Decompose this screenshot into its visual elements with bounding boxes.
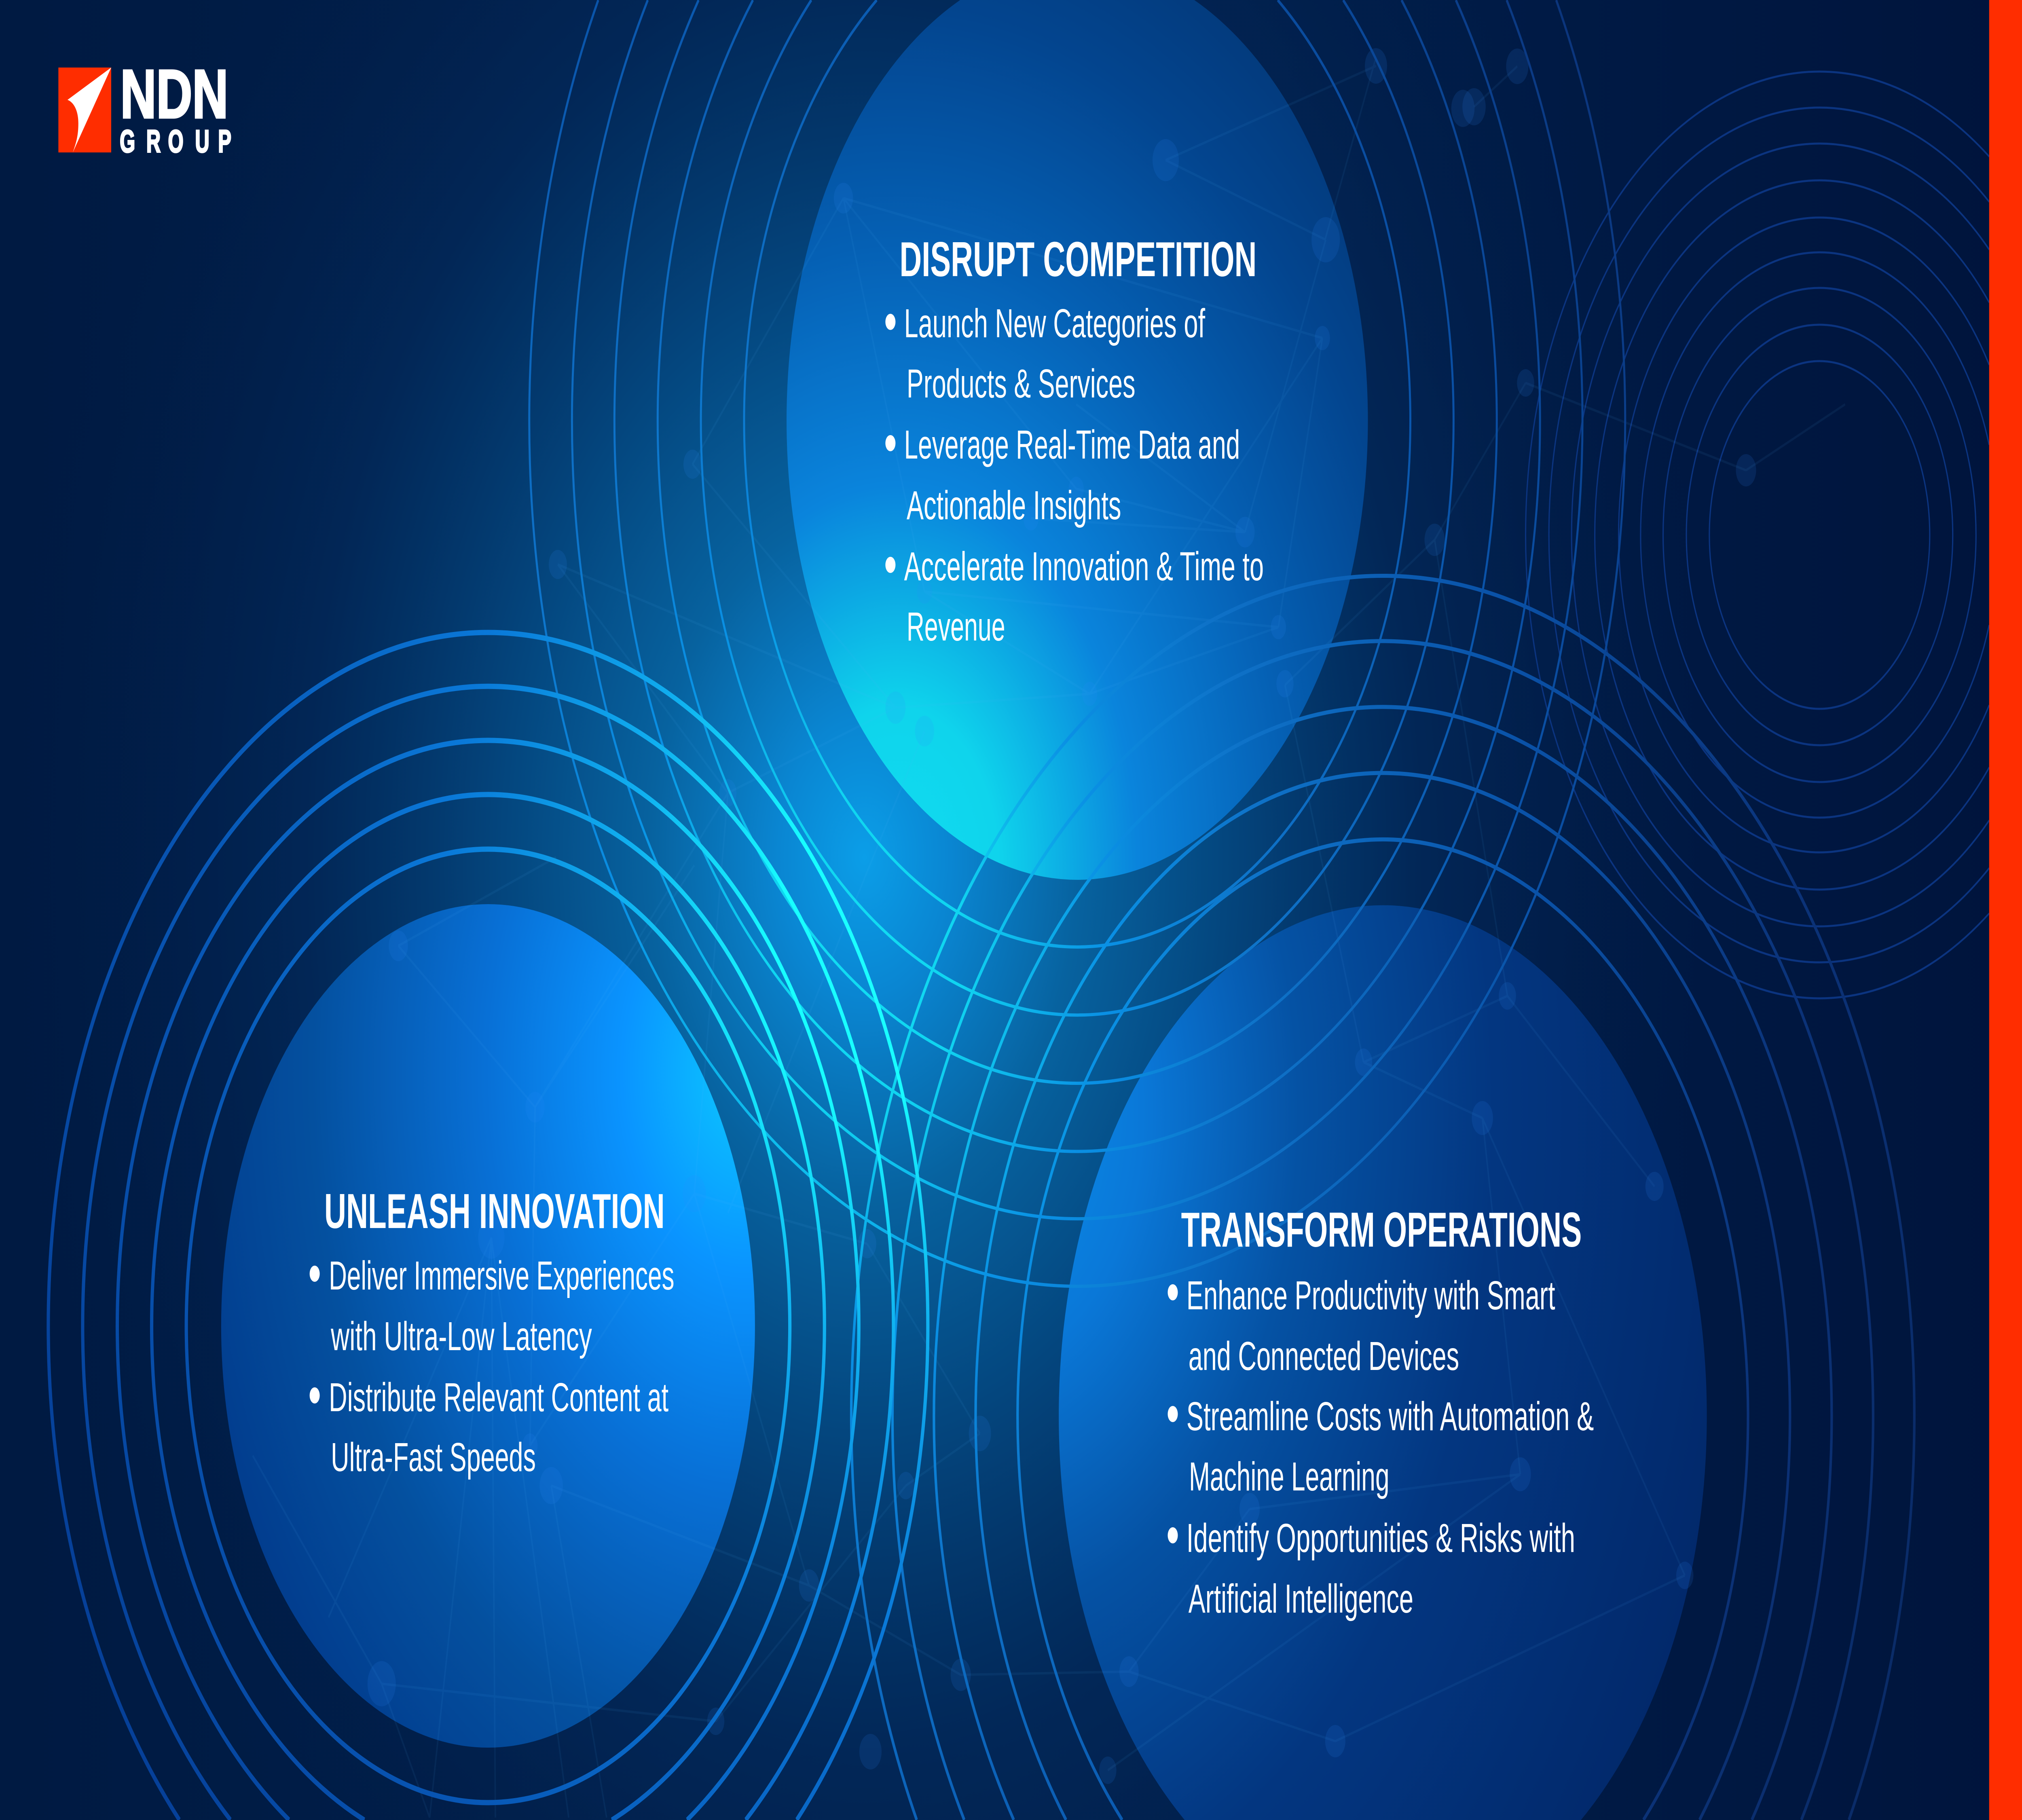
bullet list: unleash innovation: Distribute Relevant Content at: [329, 1375, 668, 1420]
panel: unleash innovation text: [310, 1184, 675, 1480]
logo wordmark: GROUP: GROUP: [120, 123, 231, 159]
right accent bar: [1989, 0, 2022, 1820]
logo wordmark: NDN: NDN: [121, 56, 228, 133]
bullet list: transform operations: Streamline Costs with Automation &: [1187, 1394, 1594, 1439]
bullet list: transform operations: Artificial Intelligence: [1189, 1576, 1413, 1621]
circle: transform operations: [1059, 905, 1707, 1820]
bullet list: disrupt competition: [885, 301, 1264, 649]
bullet list: disrupt competition: Launch New Categories of: [904, 301, 1206, 346]
panel: disrupt competition text: [885, 232, 1264, 649]
bullet list: disrupt competition: Accelerate Innovation & Time to: [904, 544, 1264, 589]
bullet list: unleash innovation: [310, 1253, 675, 1480]
rings around disrupt competition: [529, 0, 1625, 1286]
logo icon: red square with white dart: [58, 68, 111, 152]
bullet list: disrupt competition: Actionable Insights: [907, 483, 1121, 528]
far right concentric rings: [1525, 72, 1989, 998]
bullet list: transform operations: Enhance Productivity with Smart: [1187, 1273, 1555, 1318]
logo: NDN Group: [58, 56, 231, 159]
bullet list: unleash innovation: with Ultra-Low Latency: [330, 1314, 592, 1359]
bullet list: unleash innovation: Deliver Immersive Experiences: [329, 1253, 675, 1298]
bullet list: transform operations: Identify Opportunities & Risks with: [1187, 1516, 1575, 1561]
circle: unleash innovation: [221, 904, 755, 1748]
bullet list: disrupt competition: Products & Services: [907, 361, 1136, 406]
rings around transform operations: [851, 576, 1914, 1820]
network mesh overlay: [253, 48, 1845, 1818]
circle: disrupt competition: [787, 0, 1368, 880]
rings around unleash innovation: [48, 632, 928, 1820]
bullet list: disrupt competition: Revenue: [907, 604, 1005, 649]
bullet list: unleash innovation: Ultra-Fast Speeds: [331, 1435, 536, 1480]
bullet list: transform operations: Machine Learning: [1189, 1454, 1390, 1499]
bullet list: transform operations: [1168, 1273, 1594, 1621]
heading: transform operations: TRANSFORM OPERATIONS: [1181, 1202, 1582, 1257]
bullet list: transform operations: and Connected Devices: [1189, 1334, 1459, 1379]
panel: transform operations text: [1168, 1202, 1594, 1621]
heading: unleash innovation: UNLEASH INNOVATION: [324, 1184, 665, 1239]
heading: disrupt competition: DISRUPT COMPETITION: [899, 232, 1257, 287]
bullet list: disrupt competition: Leverage Real-Time Data and: [904, 422, 1240, 467]
